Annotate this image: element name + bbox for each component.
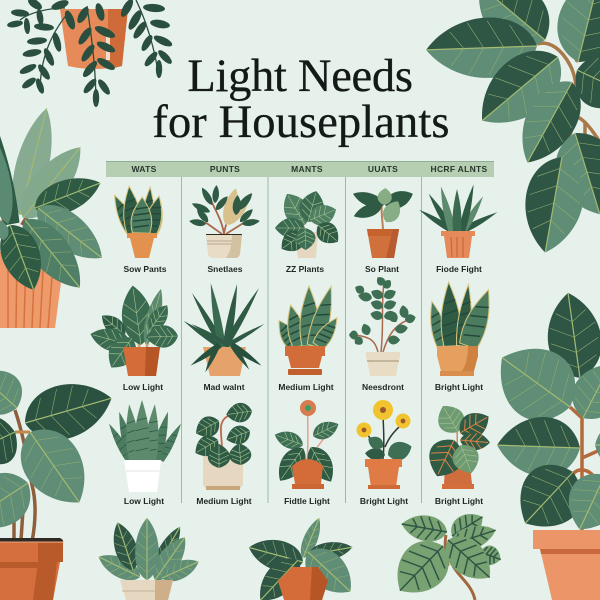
row 2 labels: Mad walnt [203, 382, 245, 392]
plant: bottom left centre [94, 518, 202, 600]
plant: pothos, row 3 col 2 [190, 401, 253, 490]
plant: flowering plant, row 3 col 3 [271, 400, 342, 489]
plant: rubber plant, row 1 col 4 [351, 186, 416, 258]
plant: snake plant, row 1 col 1 [109, 185, 167, 258]
hanging plant: left edge [0, 104, 113, 328]
plant: ZZ branch, row 2 col 4 [349, 275, 417, 376]
table header bar: UUATS [368, 164, 398, 174]
row 3 labels [124, 496, 483, 506]
hanging plant: top left [7, 0, 174, 107]
row 1 labels: Sow Pants [124, 264, 167, 274]
row 3 labels: Bright Light [435, 496, 483, 506]
row 1 labels: ZZ Plants [286, 264, 324, 274]
row 1 labels [124, 264, 482, 274]
plant: yellow flowers, row 3 col 4 [356, 400, 415, 489]
row 2 labels: Medium Light [278, 382, 334, 392]
row 3 labels: Medium Light [196, 496, 252, 506]
table header bar: HCRF ALNTS [431, 164, 488, 174]
title: for Houseplants [152, 97, 450, 148]
row 2 labels [123, 382, 483, 392]
table header bar: PUNTS [210, 164, 240, 174]
row 3 labels: Fidtle Light [284, 496, 330, 506]
plant: zebra haworthia, row 3 col 1 [105, 400, 185, 492]
table header bar [106, 161, 494, 177]
row 3 labels: Low Light [124, 496, 164, 506]
plant: bottom centre [245, 516, 363, 600]
plant: bottom right centre [383, 506, 504, 600]
plant: calathea, row 1 col 3 [275, 188, 344, 258]
title [152, 51, 450, 148]
row 1 labels: So Plant [365, 264, 399, 274]
fiddle leaf plant: top right [425, 0, 600, 258]
table header bar: WATS [131, 164, 157, 174]
large plant: bottom left [0, 358, 119, 600]
row 1 labels: Fiode Fight [436, 264, 482, 274]
title: Light Needs [187, 51, 413, 102]
row 2 labels: Low Light [123, 382, 163, 392]
row 2 labels: Neesdront [362, 382, 404, 392]
row 3 labels: Bright Light [360, 496, 408, 506]
table header bar: MANTS [291, 164, 323, 174]
plant: snake plant, row 2 col 3 [272, 284, 343, 375]
plant: croton, row 3 col 5 [421, 399, 495, 489]
plant: aloe, row 1 col 5 [417, 184, 499, 258]
plant: dieffenbachia, row 2 col 1 [88, 283, 178, 376]
row 2 labels: Bright Light [435, 382, 483, 392]
plant: snake plant, row 2 col 5 [425, 282, 499, 376]
plant: bamboo-style plant, row 1 col 2 [189, 185, 260, 258]
plant: spider aloe, row 2 col 2 [182, 282, 265, 376]
large plant: right edge [481, 289, 600, 600]
row 1 labels: Snetlaes [208, 264, 243, 274]
